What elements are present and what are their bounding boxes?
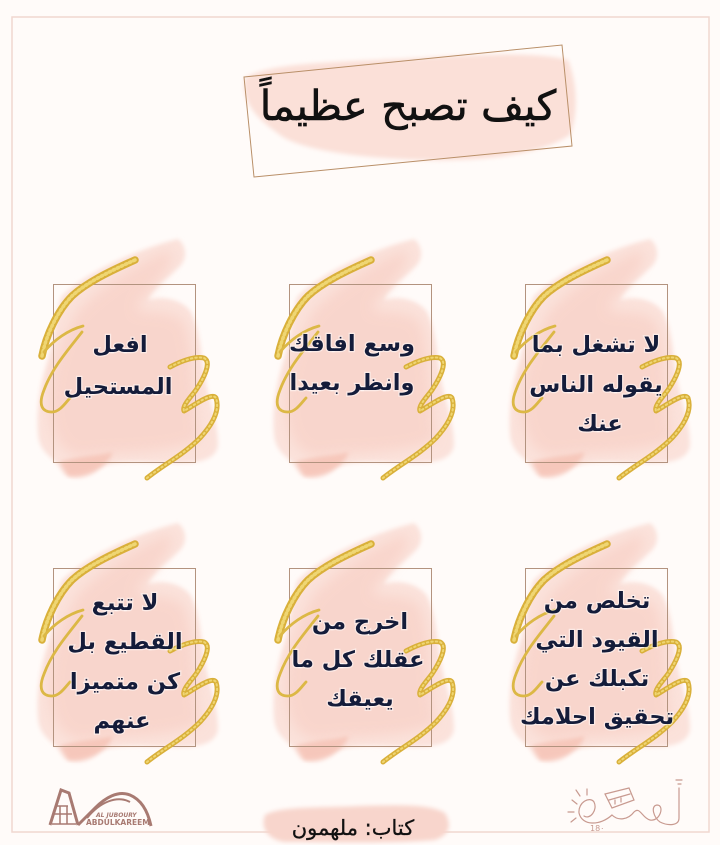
- card text: تكبلك عن: [545, 666, 649, 692]
- card text: عنك: [577, 411, 623, 437]
- title text: كيف تصبح عظيماً: [259, 76, 556, 130]
- card text: عقلك كل ما: [292, 647, 424, 673]
- card: leave your mind: [273, 523, 454, 762]
- source label watercolor: [264, 805, 449, 842]
- source label text: كتاب: ملهمون: [292, 816, 414, 840]
- card text: افعل: [92, 332, 148, 358]
- card text: تحقيق احلامك: [520, 704, 674, 730]
- card text: لا تتبع: [92, 590, 158, 616]
- title watercolor: [244, 54, 576, 160]
- logo: Osboha 180: 18۰: [590, 824, 604, 833]
- card: do not be distracted: [509, 239, 690, 478]
- card text: تخلص من: [544, 588, 650, 614]
- card: do not follow the herd: [37, 523, 218, 762]
- card text: يعيقك: [326, 686, 394, 712]
- card: widen your horizons: [273, 239, 454, 478]
- title tilted frame: [244, 45, 572, 177]
- card text: القيود التي: [535, 627, 659, 653]
- card text: وسع افاقك: [289, 331, 415, 357]
- card text: اخرج من: [312, 609, 408, 635]
- card text: كن متميزا: [70, 669, 181, 695]
- card text: يقوله الناس: [529, 372, 663, 398]
- card text: وانظر بعيدا: [290, 370, 414, 396]
- logo: Al Jubouri Abdulkareem: [50, 790, 151, 827]
- card text: عنهم: [93, 708, 151, 734]
- title banner: [244, 45, 576, 177]
- logo: Al Jubouri Abdulkareem: AL JUBOURY: [95, 812, 137, 819]
- source label: [264, 805, 449, 842]
- logo: Al Jubouri Abdulkareem: ABDULKAREEM: [86, 818, 150, 827]
- card text: لا تشغل بما: [532, 332, 660, 358]
- logo: Osboha 180: [568, 780, 682, 833]
- card text: القطيع بل: [67, 629, 183, 655]
- card: break free of restraints: [509, 523, 690, 762]
- card: do the impossible: [37, 239, 218, 478]
- card text: المستحيل: [64, 374, 172, 400]
